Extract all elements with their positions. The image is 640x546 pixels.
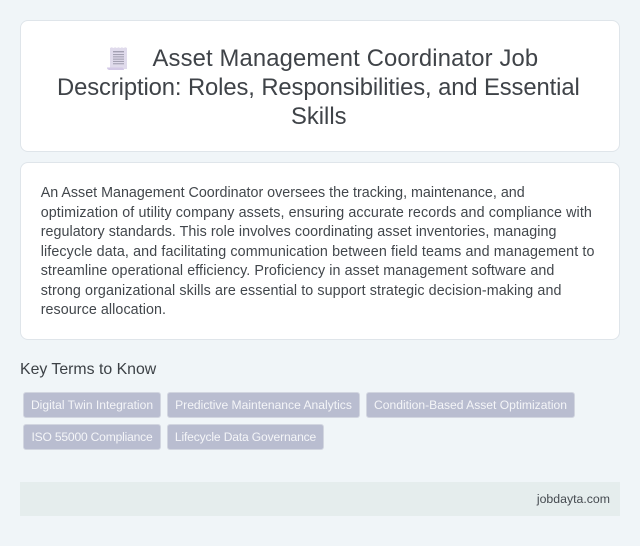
panel: title card xyxy=(20,20,620,152)
title: Asset Management Coordinator Job xyxy=(152,45,538,72)
footer bar xyxy=(20,482,620,516)
tag: ISO 55000 Compliance xyxy=(23,424,161,450)
footer source text: jobdayta.com xyxy=(537,492,610,506)
tag: Predictive Maintenance Analytics: Predictive Maintenance Analytics xyxy=(175,398,352,412)
tag: Lifecycle Data Governance: Lifecycle Data Governance xyxy=(175,430,316,444)
icon: document scroll xyxy=(107,47,127,70)
text block: description xyxy=(40,185,595,318)
title xyxy=(57,45,580,130)
tag: Predictive Maintenance Analytics xyxy=(167,392,360,418)
tag: Condition-Based Asset Optimization xyxy=(366,392,575,418)
heading: key terms: Key Terms to Know xyxy=(20,361,156,378)
title: Skills xyxy=(291,103,347,130)
text block: description: An Asset Management Coordinator oversees the tracking, maintenance, and xyxy=(41,185,525,201)
tag: Condition-Based Asset Optimization: Condition-Based Asset Optimization xyxy=(374,398,567,412)
text block: description: optimization of utility company assets, ensuring accurate records and compliance with xyxy=(41,205,592,221)
text block: description: lifecycle data, and facilitating communication between field teams and management to xyxy=(41,244,595,260)
panel: description card xyxy=(20,162,620,340)
text block: description: strong organizational skills are essential to support strategic decision-making and xyxy=(41,283,562,299)
panel: key term tags xyxy=(23,392,575,450)
text block: description: resource allocation. xyxy=(41,302,166,318)
tag: Digital Twin Integration xyxy=(23,392,161,418)
tag: Lifecycle Data Governance xyxy=(167,424,324,450)
title: Description: Roles, Responsibilities, and Essential xyxy=(57,74,580,101)
text block: description: streamline operational efficiency. Proficiency in asset management software and xyxy=(41,263,554,279)
tag: ISO 55000 Compliance: ISO 55000 Compliance xyxy=(31,430,153,444)
text block: description: regulatory standards. This role involves coordinating asset inventories, managing xyxy=(41,224,556,240)
tag: Digital Twin Integration: Digital Twin Integration xyxy=(31,398,153,412)
